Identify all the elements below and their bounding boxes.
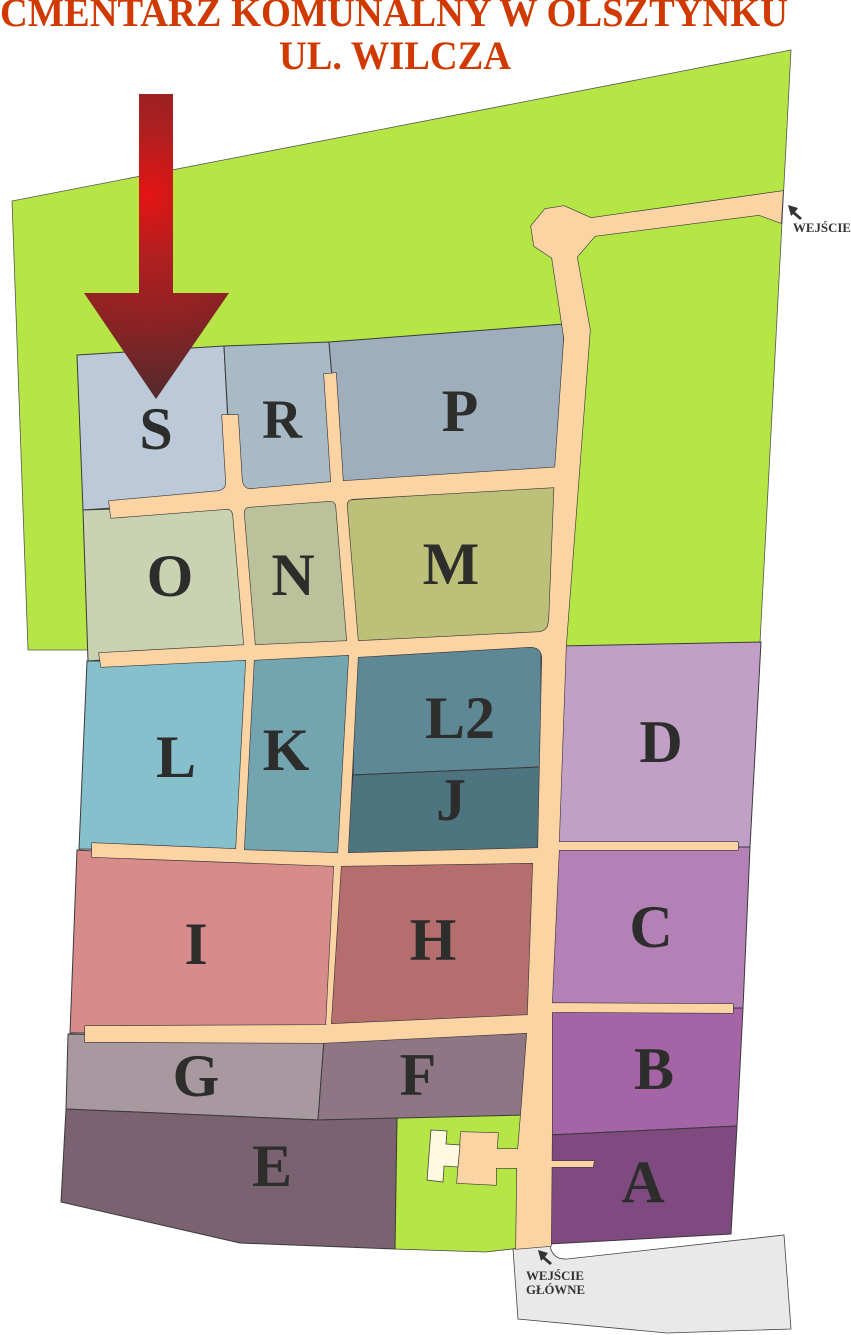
section R <box>224 342 341 494</box>
section C: C <box>629 894 673 960</box>
road network outline <box>85 191 783 1249</box>
section S <box>77 346 232 510</box>
section S: S <box>139 396 173 462</box>
chapel building <box>427 1130 460 1182</box>
label: main entrance: GŁÓWNE <box>526 1283 585 1297</box>
section J: J <box>436 767 466 833</box>
road network fill <box>85 191 783 1249</box>
section N <box>243 498 349 650</box>
section I <box>70 850 338 1033</box>
icon: arrow to side entrance <box>788 205 802 220</box>
section G: G <box>173 1043 219 1109</box>
section B <box>549 1008 743 1135</box>
section L: L <box>156 724 196 790</box>
label: side entrance: WEJŚCIE <box>793 221 851 235</box>
section E: E <box>252 1133 292 1199</box>
icon: arrow to main entrance <box>538 1250 552 1265</box>
section F: F <box>400 1042 436 1108</box>
panel: grey parking area <box>513 1235 791 1333</box>
panel: green chapel grounds <box>394 1115 525 1252</box>
section R: R <box>262 389 303 450</box>
section O <box>83 505 245 661</box>
section P: P <box>442 378 478 444</box>
section D: D <box>639 709 683 775</box>
section D <box>555 642 761 847</box>
section A <box>549 1126 737 1244</box>
section O: O <box>147 543 193 609</box>
label: main entrance: WEJŚCIE <box>526 1269 584 1283</box>
section L2: L2 <box>425 685 495 751</box>
title line 2: UL. WILCZA <box>279 33 511 78</box>
section M <box>346 486 556 645</box>
section P <box>329 324 564 482</box>
section C <box>549 847 750 1008</box>
section J <box>346 767 541 853</box>
section F <box>318 1033 530 1120</box>
section H: H <box>410 907 456 973</box>
section N: N <box>271 542 315 608</box>
section E <box>61 1109 397 1249</box>
section I: I <box>184 911 208 977</box>
section L2 <box>353 645 541 775</box>
panel: green cemetery grounds <box>12 50 791 650</box>
section G <box>66 1034 324 1120</box>
section B: B <box>634 1036 674 1102</box>
section K: K <box>263 717 310 783</box>
red location arrow <box>84 94 229 399</box>
section M: M <box>423 531 479 597</box>
section L <box>79 660 250 851</box>
section H <box>329 863 535 1024</box>
section K <box>240 655 352 853</box>
section A: A <box>621 1149 665 1215</box>
